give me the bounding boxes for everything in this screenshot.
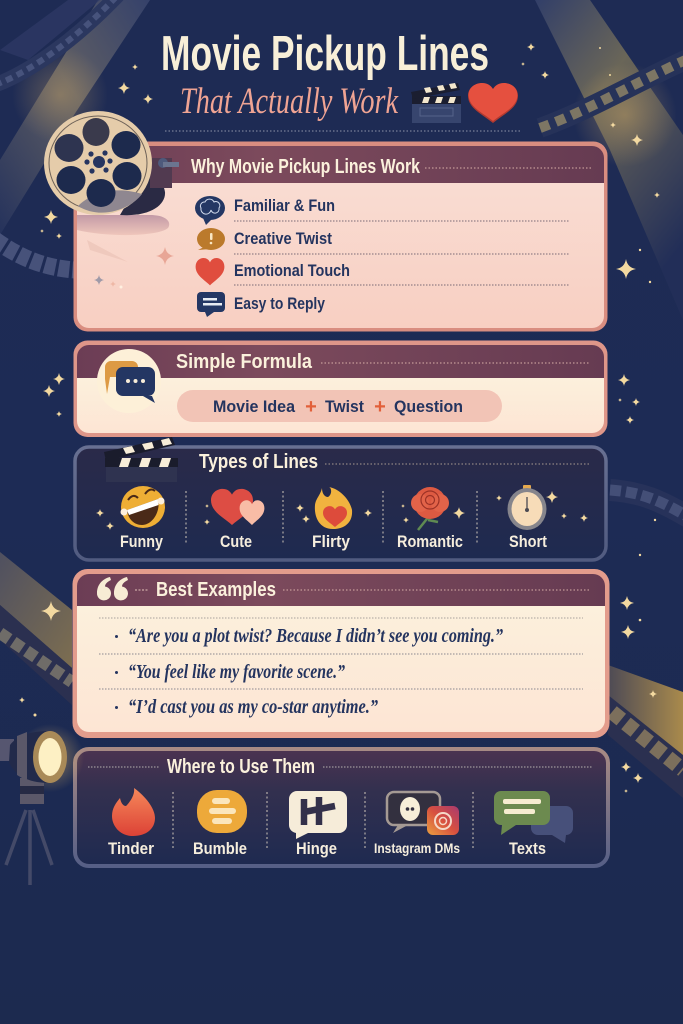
top-right spotlight beam [535, 0, 683, 320]
icon: title clapperboard [411, 83, 461, 123]
formula pill: Movie Idea [213, 397, 296, 416]
panel heading: Best Examples [156, 579, 276, 601]
subtitle: That Actually Work [180, 81, 398, 122]
label: Short [509, 532, 547, 551]
lower-right gold band and film strip [608, 665, 683, 798]
example quote 1: “Are you a plot twist? Because I didn’t see you coming.” [128, 625, 503, 647]
example quote 2: “You feel like my favorite scene.” [128, 661, 345, 683]
top-right film strip [540, 58, 683, 128]
title: Movie Pickup Lines [161, 27, 489, 81]
panel: why movie pickup lines work [74, 142, 608, 332]
decorative sparkles [19, 43, 660, 793]
small sparkles on panel [87, 240, 174, 288]
reel shadow [77, 215, 169, 235]
spotlight on tripod [0, 724, 84, 885]
icon: cute hearts [211, 489, 264, 525]
label: Hinge [296, 839, 337, 858]
label: Tinder [108, 839, 154, 858]
icon: text bubbles [494, 791, 573, 843]
label: Bumble [193, 839, 247, 858]
label: Funny [120, 532, 163, 551]
icon: funny emoji [120, 486, 165, 528]
icon: quote mark [97, 577, 128, 600]
icon: chat bubbles badge [97, 349, 161, 413]
title divider [165, 130, 520, 132]
label: Instagram DMs [374, 840, 460, 856]
right middle film strip [610, 490, 683, 518]
label: Flirty [312, 532, 350, 551]
icon: reply bubble [197, 292, 225, 317]
formula pill: Twist [325, 397, 364, 416]
icon: heart [196, 258, 224, 285]
icon: hinge bubble [289, 791, 347, 839]
icon: bumble badge [197, 790, 247, 833]
icon: tinder flame [112, 788, 155, 836]
panel: simple formula [74, 340, 608, 437]
icon: romantic rose [411, 487, 449, 530]
panel heading: Types of Lines [199, 451, 318, 473]
icon: flirty flame [315, 487, 352, 529]
panel: best examples [72, 569, 610, 738]
list item: Easy to Reply [234, 294, 325, 313]
top-left spotlight beams [0, 0, 150, 235]
formula pill: Question [394, 397, 463, 416]
formula pill: + [305, 396, 317, 418]
icon: clapperboard [104, 437, 178, 482]
left middle film strip [0, 240, 75, 270]
example quote 3: “I’d cast you as my co-star anytime.” [128, 696, 378, 718]
icon: title heart [468, 83, 518, 123]
list item: Creative Twist [234, 229, 332, 248]
film reel [44, 111, 179, 215]
top-left film strip [0, 0, 118, 85]
formula pill: + [374, 396, 386, 418]
panel heading: Why Movie Pickup Lines Work [191, 156, 421, 178]
list item: Familiar & Fun [234, 196, 335, 215]
label: Romantic [397, 532, 463, 551]
icon: stopwatch [508, 485, 546, 530]
sparkles in panel [96, 491, 588, 530]
formula pill [177, 390, 502, 422]
lower-left gold band and film strip [0, 552, 72, 705]
panel: where to use them [75, 749, 608, 866]
label: Cute [220, 532, 252, 551]
icon: brain speech bubble [195, 196, 225, 225]
panel heading: Where to Use Them [167, 756, 315, 778]
icon: instagram dms [387, 792, 459, 835]
label: Texts [509, 839, 546, 858]
list item: Emotional Touch [234, 261, 350, 280]
panel heading: Simple Formula [176, 351, 313, 373]
icon: exclamation bubble [197, 228, 225, 250]
panel: types of lines [75, 437, 606, 560]
